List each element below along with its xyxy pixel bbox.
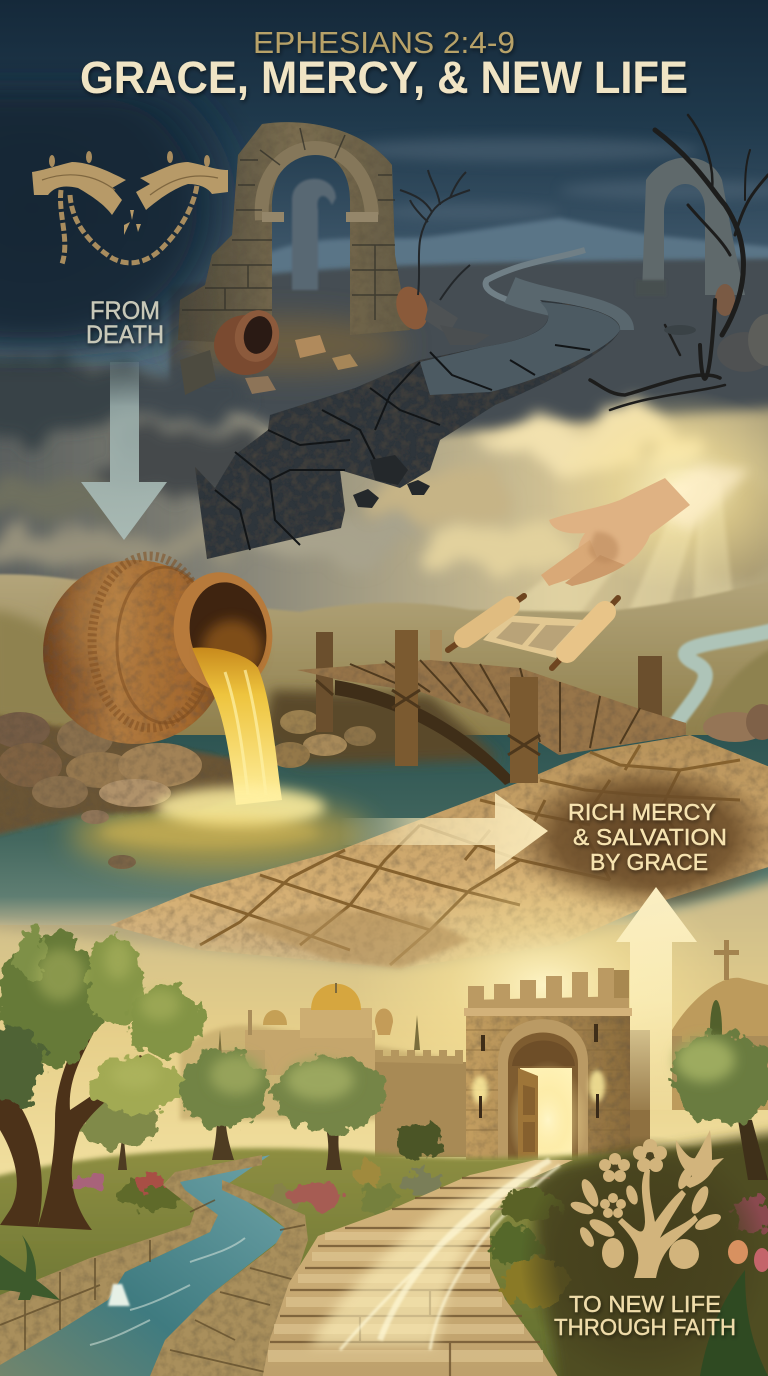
storm clouds on the left	[0, 355, 420, 568]
label: from death: FROM	[90, 297, 160, 325]
jar carved band	[92, 556, 208, 728]
leaning clay jug	[391, 282, 433, 334]
arch voussoir ring	[262, 148, 372, 220]
small waterfall	[108, 1284, 130, 1306]
middle olive tree	[177, 1052, 269, 1160]
wood grain	[42, 175, 218, 195]
right canal wall	[150, 1180, 308, 1376]
chains	[61, 185, 197, 264]
right yoke piece	[136, 162, 228, 210]
tipped clay jar	[43, 556, 282, 744]
golden stone path	[110, 735, 768, 968]
right bank rocks	[703, 704, 768, 815]
road cracks	[215, 345, 590, 550]
distant blue hills	[250, 218, 768, 300]
domed city	[215, 983, 420, 1075]
golden water pouring	[100, 647, 325, 848]
flowers	[599, 1139, 667, 1218]
flower bushes	[76, 1122, 442, 1212]
jar mouth opening	[182, 576, 274, 688]
tower cornice	[464, 1008, 632, 1016]
icon: broken yoke and chains	[32, 151, 228, 264]
label: from death: DEATH	[86, 321, 164, 349]
masonry joints	[182, 128, 402, 320]
label: from death	[86, 297, 164, 349]
left yoke piece	[32, 162, 126, 215]
slit windows	[481, 1035, 485, 1051]
shaded bank under bridge	[262, 690, 500, 765]
upward arrow	[616, 887, 697, 1110]
large olive tree	[0, 929, 203, 1230]
reaching hand	[541, 465, 750, 586]
lighter step treads	[268, 1232, 543, 1362]
far right ruined arch	[636, 158, 745, 296]
wood splinters	[124, 210, 141, 235]
main water	[0, 735, 768, 925]
right arrow	[340, 793, 548, 870]
label: to new life	[554, 1291, 736, 1340]
battlements	[468, 968, 629, 1010]
label: to new life: TO NEW LIFE	[569, 1291, 721, 1317]
sunrise glow behind gate	[355, 865, 735, 1105]
dove	[676, 1130, 724, 1188]
distant stone path fading into sky	[240, 910, 470, 968]
post ropes	[316, 680, 540, 755]
down arrow	[81, 362, 167, 540]
dark label backdrop	[520, 1135, 768, 1376]
bridge deck	[297, 660, 686, 755]
bare tree behind arch	[400, 170, 470, 300]
rock pile lower right	[664, 314, 768, 372]
scripture reference: EPHESIANS 2:4-9	[253, 25, 515, 60]
main ruined arch	[178, 122, 410, 345]
step lines	[270, 1178, 550, 1376]
title block	[80, 25, 688, 103]
canal water	[0, 1155, 285, 1376]
light stream down stairs	[310, 1160, 565, 1346]
label: rich mercy	[568, 799, 727, 875]
castle gate tower	[464, 968, 632, 1180]
splash pool	[155, 787, 325, 827]
label: rich mercy: RICH MERCY	[568, 799, 716, 825]
scripture lines	[496, 622, 540, 645]
broken grey road	[195, 250, 620, 559]
divine light glow	[550, 390, 768, 590]
bridge under-arch	[335, 680, 515, 785]
golden reflection on water	[70, 797, 370, 873]
rock bank	[0, 710, 376, 869]
foreground plants left	[0, 1235, 60, 1300]
ancient scroll	[448, 596, 618, 668]
left canal wall	[0, 1155, 262, 1365]
warm dirt around ruined arch	[175, 317, 405, 373]
wall joints	[0, 1200, 305, 1372]
parchment	[483, 615, 585, 658]
cross hill	[672, 978, 768, 1110]
rope bridge	[297, 630, 686, 785]
hill shading	[0, 610, 120, 720]
bridge near posts	[395, 630, 538, 783]
left dark panel behind yoke and from-death label	[0, 90, 240, 352]
light rays from above	[455, 470, 740, 700]
lighter upper road	[420, 302, 620, 395]
falling road fragments	[353, 455, 430, 508]
yoke pegs	[49, 151, 210, 167]
dead tree on right	[590, 115, 768, 410]
foreground flowers right	[700, 1240, 768, 1376]
foreground shrubs by stairs	[489, 1190, 768, 1307]
foliage highlights	[36, 940, 180, 1089]
far hills	[180, 1025, 460, 1120]
left roller	[448, 596, 524, 650]
city wall	[375, 1030, 768, 1160]
palm and thumb	[549, 478, 690, 572]
gate arch surround	[498, 1019, 588, 1160]
bridge far posts	[316, 630, 662, 736]
torches	[472, 1070, 605, 1118]
brown label backdrop	[510, 763, 768, 913]
background: stormy to golden cloud sky	[0, 357, 768, 620]
main heading: GRACE, MERCY, & NEW LIFE	[80, 52, 688, 103]
golden clouds on the right	[370, 416, 768, 580]
pier capitals	[262, 212, 378, 222]
winding far road	[486, 250, 585, 308]
stone course lines	[466, 1030, 630, 1130]
glowing stone stairs	[262, 1160, 573, 1376]
cloud streaks in dusk sky	[340, 138, 768, 220]
background: golden sky of new life section	[0, 870, 768, 1200]
hills of middle landscape	[0, 574, 768, 760]
water glints	[90, 1238, 245, 1345]
leaves	[569, 1165, 723, 1249]
right olive tree	[670, 1032, 768, 1180]
small distant tree	[82, 1096, 158, 1170]
palm shading	[588, 532, 618, 563]
label: rich mercy: & SALVATION	[573, 824, 727, 850]
cross	[714, 940, 739, 980]
fingers	[541, 540, 600, 586]
winding far river	[668, 630, 768, 735]
label: to new life: THROUGH FAITH	[554, 1314, 736, 1340]
fruit	[602, 1238, 624, 1268]
bright gateway	[520, 1068, 572, 1160]
cracked road body	[195, 300, 620, 559]
tree trunk and branches	[618, 1170, 698, 1278]
right grassy slope	[700, 640, 768, 730]
gate glow	[508, 1060, 588, 1180]
clay pot toppled	[214, 306, 284, 375]
icon: tree with flowers, fruit and dove	[569, 1130, 724, 1278]
dark right meadow	[530, 1130, 768, 1376]
jar rim	[164, 564, 282, 700]
center olive tree	[274, 1057, 386, 1170]
rubble	[180, 300, 490, 395]
label: rich mercy: BY GRACE	[590, 849, 708, 875]
stone-lined canal	[0, 1155, 308, 1376]
right roller	[552, 598, 618, 668]
background: dusk sky of death section	[0, 0, 768, 400]
far clay jar	[715, 284, 735, 316]
meadow ground	[0, 1140, 768, 1376]
cypress on hill	[710, 1000, 722, 1060]
back ruined arch	[292, 179, 336, 290]
barren ground	[170, 258, 768, 450]
fading forearm	[640, 465, 750, 530]
open wooden door	[518, 1068, 538, 1160]
